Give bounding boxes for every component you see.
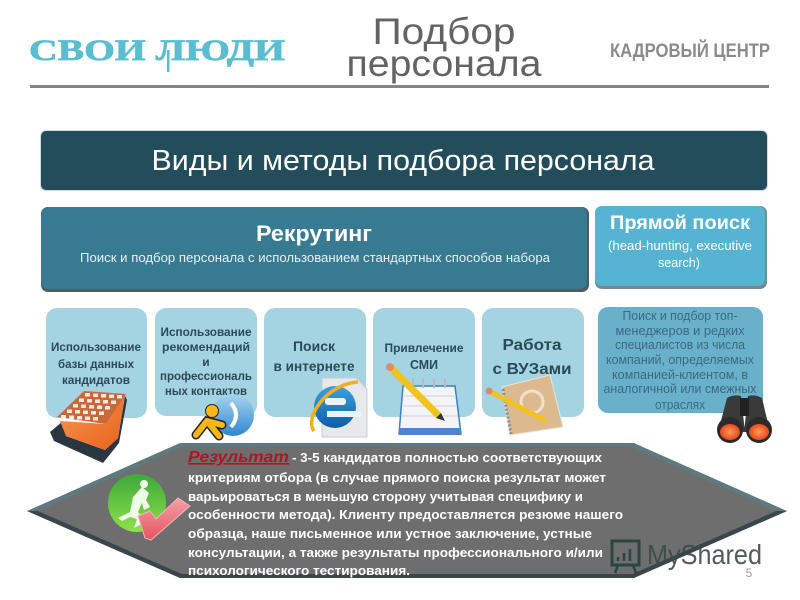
result text [188,449,623,578]
banner: виды и методы [40,130,768,191]
card: поиск в интернете: в интернете [274,358,355,374]
banner: виды и методы: Виды и методы подбора персонала [152,145,655,177]
card: работа с вузами: с ВУЗами [492,361,572,378]
page number: 5 [746,566,753,580]
card: рекомендации: Использование [160,325,252,339]
icon: тетрадь и карандаш [486,375,563,435]
watermark: myshared [612,539,762,573]
card: рекомендации: рекомендаций [162,340,250,354]
panel: прямой поиск: Прямой поиск [610,213,751,234]
card: описание прямого поиска [598,307,763,413]
panel: рекрутинг [41,207,589,292]
icon: бегун и галочка [108,474,190,540]
result text: варьироваться в меньшую сторону учитывая специфику и [188,489,583,504]
card: база данных: кандидатов [62,373,130,387]
card: описание прямого поиска: компаний, определяемых [606,353,755,367]
card: поиск в интернете: Поиск [293,338,336,354]
panel: прямой поиск: search) [658,255,700,270]
card: рекомендации: и [202,355,210,369]
panel: прямой поиск: (head-hunting, executive [608,238,752,253]
result text: - 3-5 кандидатов полностью соответствующих [292,450,603,465]
icon: internet explorer [312,378,367,437]
card: описание прямого поиска: компанией-клиентом, в [612,368,748,382]
card: база данных: Использование [51,340,141,354]
result text: психологического тестирования. [188,563,410,578]
result text: особенности метода). Клиенту предоставляется резюме нашего [188,507,623,522]
result text: образца, наше письменное или устное заключение, устные [188,526,592,541]
result text: консультации, а также результаты профессионального и/или [188,545,603,560]
icon: картотека [50,391,127,463]
panel: прямой поиск [595,206,767,289]
card: поиск в интернете [264,308,366,417]
card: описание прямого поиска: менеджеров и редких [616,324,745,338]
card: описание прямого поиска: специалистов из числа [615,338,745,352]
card: привлечение сми: Привлечение [384,341,464,355]
card: база данных: базы данных [58,357,134,371]
title: Подбор [372,11,516,52]
icon: бинокль [717,395,772,443]
card: рекомендации [155,308,257,416]
card: привлечение сми [373,308,475,417]
heading: кадровый центр: КАДРОВЫЙ ЦЕНТР [610,40,770,62]
card: описание прямого поиска: отраслях [655,398,706,412]
card: работа с вузами [482,308,584,417]
arrow panel: результат [27,443,787,578]
panel: рекрутинг: Поиск и подбор персонала с использованием стандартных способов набора [80,250,551,265]
card: описание прямого поиска: Поиск и подбор топ- [622,309,738,323]
panel: рекрутинг: Рекрутинг [256,221,372,246]
title [346,11,542,84]
card: база данных [46,308,147,418]
card: описание прямого поиска: аналогичной или смежных [604,382,757,396]
title: персонала [346,43,542,84]
watermark: myshared: MyShared [647,539,762,570]
card: работа с вузами: Работа [502,337,562,354]
icon: блокнот и карандаш [386,363,461,435]
result text: Результат [188,449,289,466]
logo: Свои люди: СВОИ ЛЮДИ [29,34,285,67]
card: привлечение сми: СМИ [410,357,438,372]
card: рекомендации: профессиональ [160,369,252,383]
result text: критериям отбора (в случае прямого поиска результат может [188,470,606,485]
icon: телефон и человечек [196,394,254,436]
card: рекомендации: ных контактов [165,384,247,398]
